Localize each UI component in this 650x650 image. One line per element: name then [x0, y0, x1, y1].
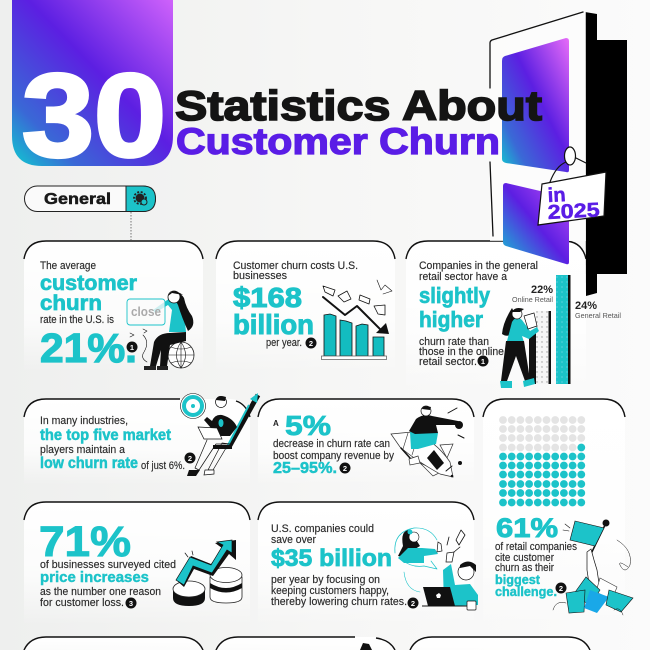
hero gradient block with number 30: 30 [22, 50, 166, 182]
panel: next row card left [24, 637, 203, 650]
panel: 71% price increases: price increases [40, 570, 149, 586]
citation badge 2 [408, 598, 418, 608]
hanging sign: in 2025: in [547, 184, 566, 207]
illustration: customer video call and support agent [395, 528, 478, 610]
panel: average churn rate: 21%. [40, 325, 137, 371]
door lower panel [503, 183, 569, 264]
panel: top five market players: the top five market [40, 427, 171, 444]
panel: $35 billion savings: keeping customers happy, [271, 585, 389, 597]
panel: 61% of retail companies: cite customer [495, 552, 554, 564]
panel: 61% of retail companies: biggest [495, 573, 541, 587]
panel: retail sector churn: churn rate than [419, 336, 489, 348]
panel: top five market players: players maintain a [40, 444, 125, 456]
panel: 61% of retail companies [483, 399, 633, 630]
panel: top five market players [24, 393, 258, 485]
title: Customer Churn [176, 121, 500, 162]
bar chart: general vs online retail: 22% [531, 284, 553, 296]
section heading: General [24, 186, 156, 240]
panel: retail sector churn: Companies in the general [419, 260, 538, 272]
panel: next row card right [410, 637, 590, 650]
panel: cost of churn [216, 241, 395, 372]
panel: retail sector churn: higher [419, 307, 483, 332]
panel: cost of churn: Customer churn costs U.S. [233, 260, 358, 272]
panel: average churn rate: churn [40, 292, 102, 315]
panel: cost of churn: $168 [233, 282, 302, 313]
hanging sign: in 2025 [538, 147, 606, 225]
citation badge 2: 2 [343, 464, 347, 473]
citation badge 1 [126, 342, 138, 352]
illustration: man with laptop, target and rising arrow [180, 393, 258, 476]
section heading: General: General [44, 191, 111, 208]
title: Statistics About [175, 82, 542, 129]
panel: 5% decrease: A [273, 419, 279, 428]
panel: average churn rate: customer [40, 272, 137, 295]
citation badge 1: 1 [481, 357, 485, 366]
citation badge 3: 3 [129, 599, 133, 608]
panel: retail sector churn: retail sector have a [419, 271, 507, 283]
panel: $35 billion savings: U.S. companies could [271, 523, 374, 535]
illustration: flag and raised hands with papers [553, 520, 633, 615]
panel: $35 billion savings [258, 502, 478, 625]
panel: cost of churn: billion [233, 309, 314, 340]
panel: retail sector churn: those in the online [419, 346, 504, 358]
panel: 61% of retail companies: challenge. [495, 585, 557, 599]
illustration: woman on globe holding close sign: close [131, 305, 161, 319]
bar chart: general vs online retail: 24% [575, 300, 597, 312]
panel: 71% price increases: for customer loss. [40, 597, 124, 609]
illustration: woman on globe holding close sign [127, 291, 194, 370]
citation badge 2: 2 [559, 584, 563, 593]
panel: average churn rate [24, 241, 203, 372]
panel: 61% of retail companies: 61% [496, 513, 558, 543]
panel: $35 billion savings: per year by focusing on [271, 574, 380, 586]
door illustration [490, 12, 627, 296]
citation badge 2: 2 [309, 339, 313, 348]
icon: gear [134, 192, 147, 205]
panel: 71% price increases: of businesses surveyed cited [40, 559, 176, 571]
panel: top five market players: In many industries, [40, 415, 128, 427]
panel: $35 billion savings: save over [271, 534, 316, 546]
citation badge 2: 2 [411, 599, 415, 608]
panel: cost of churn: per year. [266, 337, 302, 349]
panel: 71% price increases [24, 502, 250, 625]
citation badge 2: 2 [188, 454, 192, 463]
citation badge 2 [340, 462, 350, 474]
chart: falling bars with arrow [322, 280, 392, 360]
citation badge 3 [126, 598, 136, 608]
panel: 71% price increases: as the number one reason [40, 586, 161, 598]
illustration: person riding rocket [391, 406, 464, 477]
panel: 5% decrease: decrease in churn rate can [273, 438, 390, 450]
panel: 5% decrease: boost company revenue by [273, 450, 395, 462]
door upper panel [502, 38, 569, 172]
panel: average churn rate: rate in the U.S. is [40, 314, 115, 326]
panel: $35 billion savings: thereby lowering churn rates. [271, 596, 407, 608]
panel: 61% of retail companies: of retail companies [495, 541, 578, 553]
title [175, 82, 542, 162]
illustration: coins with rising arrow [173, 540, 242, 606]
panel: 5% decrease: 5% [285, 410, 331, 441]
panel: 5% decrease: 25–95%. [273, 460, 337, 477]
panel: retail sector churn: retail sector. [419, 356, 477, 368]
illustration: woman with clipboard [500, 308, 539, 388]
panel: retail sector churn [406, 241, 621, 390]
citation badge 2 [306, 338, 316, 348]
citation badge 1 [478, 356, 488, 366]
bar chart: general vs online retail: Online Retail [512, 295, 553, 304]
citation badge 1: 1 [130, 343, 134, 352]
bar chart: general vs online retail [512, 275, 621, 384]
panel: top five market players: low churn rate [40, 455, 138, 472]
panel: top five market players: of just 6%. [141, 460, 185, 472]
panel: next row card centre [216, 637, 395, 650]
panel: $35 billion savings: $35 billion [271, 545, 392, 572]
panel: cost of churn: businesses [233, 270, 288, 282]
panel: 71% price increases: 71% [39, 518, 131, 566]
panel: average churn rate: The average [40, 260, 96, 272]
panel: retail sector churn: slightly [419, 283, 491, 308]
panel: 5% decrease [258, 399, 474, 485]
panel: 61% of retail companies: churn as their [495, 562, 554, 574]
hero gradient block with number 30 [12, 0, 173, 182]
bar chart: general vs online retail: General Retail [575, 311, 621, 320]
citation badge 2 [184, 452, 196, 464]
hanging sign: in 2025: 2025 [547, 199, 600, 224]
citation badge 2 [556, 582, 566, 594]
waffle chart: 61 of 100 [499, 416, 585, 506]
